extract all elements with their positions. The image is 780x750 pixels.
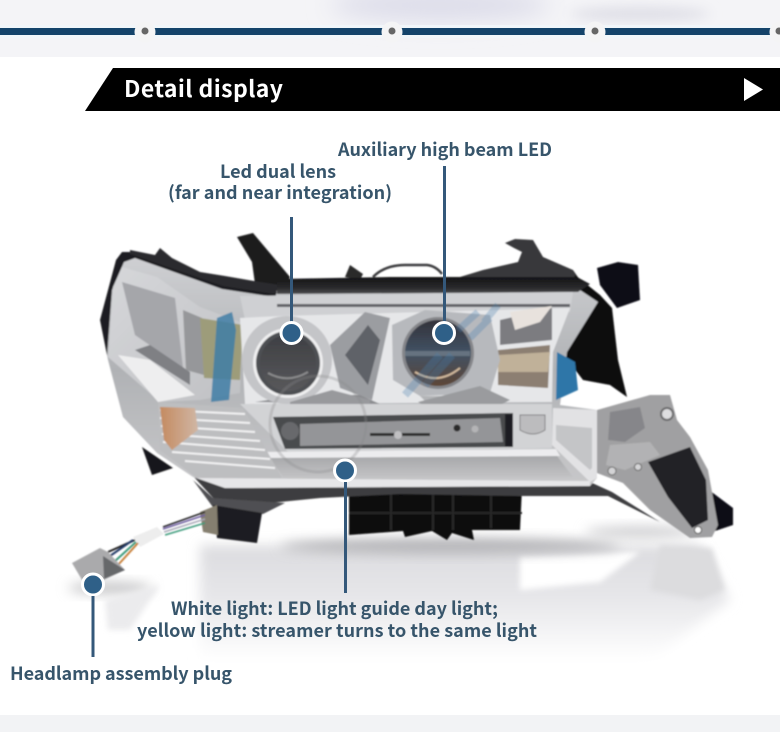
small top clip	[345, 265, 363, 280]
top band	[0, 0, 780, 57]
bottom band	[0, 715, 780, 732]
left black tab	[142, 447, 173, 475]
left top trim	[130, 248, 280, 294]
arrow	[744, 78, 763, 101]
central window	[240, 404, 552, 454]
middle reflector	[240, 306, 570, 406]
heading bar	[85, 68, 780, 111]
day light guide strip	[270, 456, 573, 480]
callout: Led dual lens: Led dual lens	[220, 158, 336, 184]
rivet 4	[770, 22, 780, 42]
right black panel	[560, 275, 627, 397]
lower black connector	[349, 488, 522, 540]
turn signal	[158, 402, 282, 478]
plug	[72, 548, 125, 585]
blue watermark	[270, 305, 498, 472]
right chrome side	[552, 408, 597, 482]
lower edge highlight	[197, 478, 590, 488]
top mounting clip left	[237, 233, 290, 292]
right black connector	[597, 262, 640, 308]
strip frame line	[255, 449, 560, 458]
lamp body	[100, 252, 598, 488]
lower trim	[193, 476, 660, 522]
callout: Auxiliary high beam LED	[337, 136, 552, 344]
callout: Auxiliary high beam LED: Auxiliary high beam LED	[337, 136, 552, 162]
chrome upper strip	[240, 292, 573, 320]
top mounting tab right	[450, 239, 580, 280]
callout: LED light guide: yellow light: streamer turns to the same light	[137, 617, 537, 643]
small side lens	[520, 415, 545, 434]
black upper bar	[277, 277, 590, 294]
left projector	[242, 316, 332, 404]
right mounting bracket	[597, 395, 718, 538]
callout: Headlamp assembly plug: Headlamp assembly plug	[10, 660, 232, 686]
callout: LED light guide: White light: LED light guide day light;	[171, 595, 498, 621]
right projector	[392, 310, 500, 396]
wiring harness	[72, 480, 285, 585]
yellow reflector	[200, 318, 243, 380]
rear black tab	[705, 487, 733, 532]
headlamp	[72, 233, 733, 585]
heading text: Detail display	[124, 70, 283, 104]
callout: Headlamp assembly plug	[10, 574, 232, 686]
rivet 1	[134, 22, 156, 42]
callout: Led dual lens	[168, 158, 392, 344]
bezel fins	[290, 390, 370, 405]
floor reflection	[68, 526, 730, 660]
callout: Led dual lens: (far and near integration)	[168, 179, 392, 205]
blue watermark band	[211, 312, 236, 402]
rivet 2	[382, 22, 402, 42]
right blue reflection	[556, 352, 578, 400]
left lens section	[108, 267, 243, 402]
top wire loop	[373, 265, 442, 277]
dark frame top	[100, 252, 277, 355]
callout: LED light guide	[137, 460, 537, 643]
rivet 3	[584, 22, 606, 42]
